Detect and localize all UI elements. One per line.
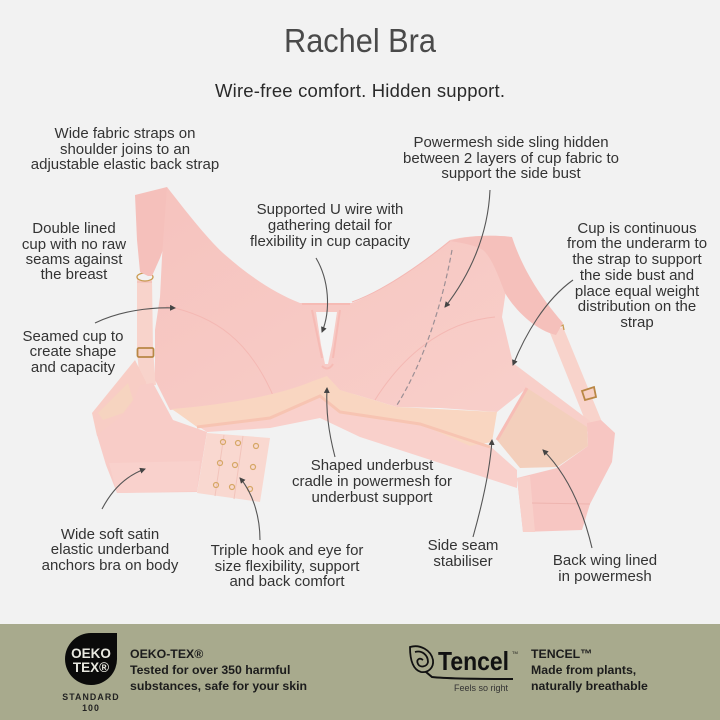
- keyhole cutout: [316, 312, 337, 364]
- keyhole bars: [302, 304, 350, 368]
- oeko-tex logo: [62, 633, 120, 713]
- tencel logo: [410, 646, 518, 693]
- left fabric strap: [135, 187, 176, 276]
- annotation: triple hook and eye: [211, 542, 363, 590]
- footer band: [0, 624, 720, 720]
- tencel logo: TM: [512, 650, 518, 655]
- tencel logo: Feels so right: [454, 683, 509, 693]
- arrow: U wire: [316, 258, 328, 332]
- back wing fabric left: [97, 383, 207, 493]
- tencel logo: Tencel: [438, 646, 509, 676]
- annotation: continuous cup: from the underarm to: [567, 235, 707, 252]
- oeko-tex logo: STANDARD: [62, 692, 120, 702]
- annotation: continuous cup: Cup is continuous: [577, 220, 697, 237]
- underbust powermesh cradle: [172, 376, 497, 446]
- subtitle: Wire-free comfort. Hidden support.: [215, 80, 505, 101]
- arrow: side seam: [473, 440, 492, 537]
- oeko-tex text: Tested for over 350 harmful: [130, 663, 290, 677]
- cup seams: [166, 241, 495, 400]
- arrow: continuous cup: [513, 280, 573, 365]
- oeko-tex text: OEKO-TEX®: [130, 647, 203, 661]
- annotation: double lined cup: cup with no raw: [22, 236, 126, 253]
- oeko-tex logo: OEKO: [71, 646, 111, 661]
- annotation: seamed cup: [23, 328, 123, 376]
- annotation: double lined cup: seams against: [26, 251, 123, 268]
- right cup edge strip: [513, 363, 590, 432]
- annotation: continuous cup: the strap to support: [572, 251, 702, 268]
- tencel text: TENCEL™: [531, 647, 592, 661]
- annotation: triple hook and eye: size flexibility, support: [215, 558, 360, 575]
- annotation: supported U wire: [250, 201, 411, 250]
- annotation: continuous cup: strap: [620, 314, 654, 331]
- oeko-tex text: [130, 647, 307, 693]
- annotation: wide soft underband: elastic underband: [51, 541, 169, 558]
- annotation: shaped underbust cradle: [292, 457, 452, 506]
- arrow: back wing: [543, 450, 592, 548]
- annotation: double lined cup: Double lined: [32, 220, 116, 237]
- right powermesh wing panel: [497, 388, 588, 468]
- left elastic strap: [137, 273, 156, 385]
- annotation: continuous cup: the side bust and: [580, 267, 694, 284]
- arrow: underband: [102, 469, 145, 509]
- annotation: supported U wire: gathering detail for: [268, 217, 392, 234]
- annotation: supported U wire: flexibility in cup capacity: [250, 233, 411, 250]
- annotation: wide soft underband: Wide soft satin: [61, 526, 159, 543]
- arrows: [95, 190, 592, 548]
- arrow: seamed cup: [95, 308, 175, 323]
- underband centre: [170, 385, 517, 488]
- annotation: side seam stabiliser: Side seam: [428, 537, 498, 554]
- annotation: side seam stabiliser: [428, 537, 498, 570]
- annotation: triple hook and eye: and back comfort: [229, 573, 345, 590]
- dashed side sling line: [397, 250, 452, 405]
- right back wing: [517, 420, 615, 532]
- annotation: shaped underbust cradle: Shaped underbust: [311, 457, 434, 474]
- annotation: wide fabric straps: adjustable elastic back strap: [31, 156, 219, 173]
- arrow: hook and eye: [240, 478, 260, 540]
- tencel text: Made from plants,: [531, 663, 636, 677]
- bra illustration: [92, 187, 615, 532]
- annotation: wide soft underband: [42, 526, 179, 574]
- oeko-tex logo: TEX®: [73, 660, 109, 675]
- annotation: supported U wire: Supported U wire with: [257, 201, 403, 218]
- annotation: double lined cup: the breast: [41, 266, 108, 283]
- annotation: back wing: [553, 552, 657, 585]
- annotation: side seam stabiliser: stabiliser: [433, 553, 493, 570]
- annotation: shaped underbust cradle: underbust support: [312, 489, 433, 506]
- annotation: powermesh side sling: support the side bust: [441, 165, 581, 182]
- arrow: underbust cradle: [327, 388, 335, 457]
- annotation: wide fabric straps: shoulder joins to an: [60, 141, 190, 158]
- annotation: back wing: Back wing lined: [553, 552, 657, 569]
- annotation: seamed cup: Seamed cup to: [23, 328, 123, 345]
- annotation: continuous cup: distribution on the: [578, 298, 696, 315]
- tencel text: [531, 647, 648, 693]
- annotation: powermesh side sling: Powermesh side sling hidden: [413, 134, 609, 151]
- annotation: powermesh side sling: [403, 134, 619, 182]
- right elastic strap: [550, 325, 602, 425]
- annotation: continuous cup: place equal weight: [575, 283, 700, 300]
- annotation: continuous cup: [567, 220, 707, 331]
- title: Rachel Bra: [284, 22, 437, 59]
- annotation: seamed cup: and capacity: [31, 359, 116, 376]
- underbust edge elastic: [197, 396, 490, 447]
- annotation: shaped underbust cradle: cradle in powermesh for: [292, 473, 452, 490]
- left band seam: [109, 461, 200, 493]
- annotation: seamed cup: create shape: [30, 343, 116, 360]
- left inner mesh: [98, 383, 133, 420]
- annotation: wide soft underband: anchors bra on body: [42, 557, 179, 574]
- oeko-tex logo: 100: [82, 703, 100, 713]
- main cups: [155, 187, 527, 412]
- annotation: wide fabric straps: Wide fabric straps on: [55, 125, 195, 142]
- tencel text: naturally breathable: [531, 679, 648, 693]
- oeko-tex text: substances, safe for your skin: [130, 679, 307, 693]
- arrow: powermesh sling: [445, 190, 490, 307]
- annotation: back wing: in powermesh: [558, 568, 652, 585]
- back wing rim left: [92, 360, 150, 436]
- right fabric strap: [450, 236, 563, 335]
- annotation: wide fabric straps: [31, 125, 219, 173]
- annotation: triple hook and eye: Triple hook and eye for: [211, 542, 363, 559]
- annotation: powermesh side sling: between 2 layers of cup fabric to: [403, 150, 619, 167]
- annotation: double lined cup: [22, 220, 126, 283]
- hook and eye tape: [197, 433, 270, 502]
